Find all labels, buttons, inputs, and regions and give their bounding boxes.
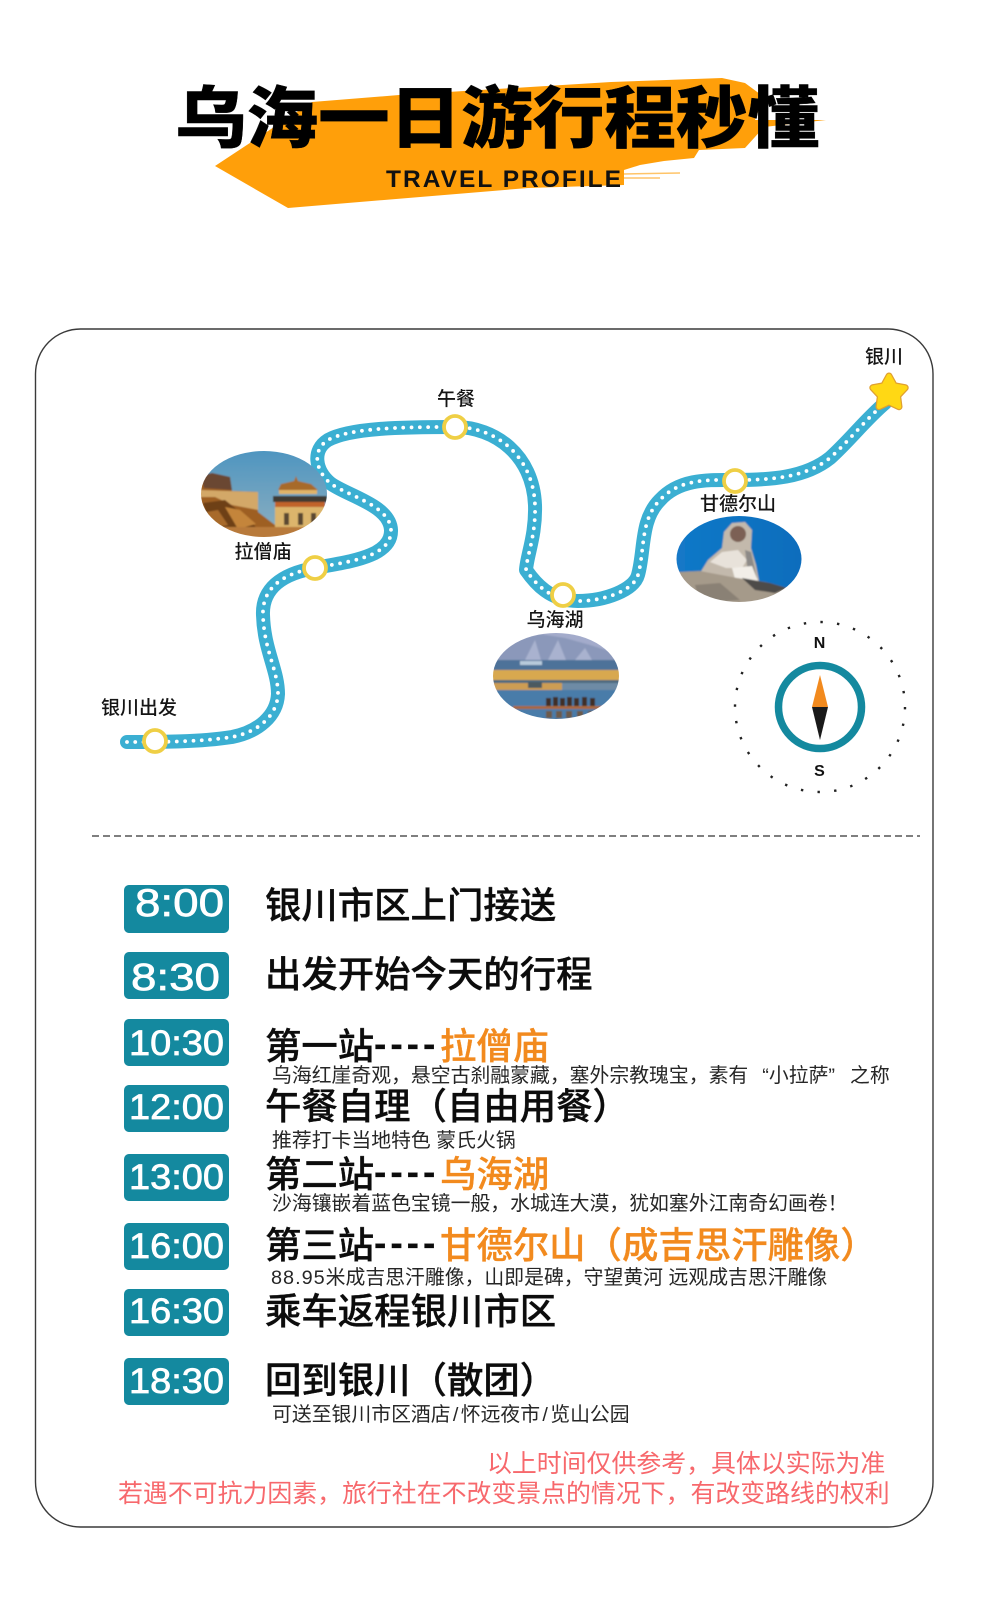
- needle south: [812, 707, 828, 740]
- row 16:30: 16:30: [129, 1292, 224, 1331]
- disclaimer: 若遇不可抗力因素，旅行社在不改变景点的情况下，有改变路线的权利: [118, 1480, 890, 1508]
- panel: itinerary card: [36, 329, 933, 1527]
- row 13:00: 沙海镶嵌着蓝色宝镜一般，水城连大漠，犹如塞外江南奇幻画卷！: [272, 1193, 847, 1215]
- row 13:00: [124, 1151, 847, 1215]
- divider: [92, 835, 920, 837]
- row 18:30: 回到银川（散团）: [265, 1360, 556, 1401]
- photo: genghis khan statue: [676, 516, 802, 602]
- row 13:00: 第二站: [265, 1154, 374, 1195]
- row 12:00: 推荐打卡当地特色 蒙氏火锅: [272, 1130, 516, 1152]
- row 10:30: 第一站: [265, 1026, 374, 1067]
- row 16:00: 甘德尔山（成吉思汗雕像）: [440, 1225, 877, 1266]
- subtitle: TRAVEL PROFILE: [386, 166, 621, 193]
- label: lunch: 午餐: [437, 388, 475, 410]
- route stops: [144, 416, 746, 752]
- row 10:30: 拉僧庙: [440, 1026, 549, 1067]
- label: start: 银川出发: [101, 697, 177, 719]
- label: lake: 乌海湖: [526, 609, 584, 631]
- row 16:00: 第三站: [265, 1225, 374, 1266]
- row 18:30: 可送至银川市区酒店/怀远夜市/览山公园: [272, 1404, 630, 1426]
- route line: [127, 403, 885, 742]
- row 12:00: 12:00: [129, 1088, 224, 1127]
- photo: wuhai lake: [493, 633, 619, 719]
- row 18:30: 18:30: [129, 1362, 224, 1401]
- row 13:00: ----: [374, 1151, 439, 1192]
- row 8:30: [124, 952, 593, 999]
- disclaimer: [118, 1450, 890, 1508]
- letter N: N: [814, 635, 825, 652]
- row 16:00: ----: [374, 1222, 439, 1263]
- compass ring: [778, 666, 862, 748]
- row 8:00: 银川市区上门接送: [265, 885, 556, 926]
- letter S: S: [814, 763, 825, 780]
- orange brush stroke: [215, 78, 826, 208]
- row 10:30: 10:30: [129, 1024, 224, 1063]
- compass: [735, 622, 905, 792]
- dotted ring: [735, 622, 905, 792]
- route map: [101, 346, 905, 752]
- title block: [175, 78, 826, 208]
- row 16:00: 16:00: [129, 1227, 224, 1266]
- label: mountain: 甘德尔山: [700, 493, 776, 515]
- row 10:30: 乌海红崖奇观，悬空古刹融蒙藏，塞外宗教瑰宝，素有 “小拉萨” 之称: [272, 1065, 890, 1087]
- row 8:00: 8:00: [135, 882, 224, 925]
- row 16:00: [124, 1222, 877, 1289]
- row 10:30: ----: [374, 1023, 439, 1064]
- row 16:00: 88.95米成吉思汗雕像，山即是碑，守望黄河 远观成吉思汗雕像: [271, 1267, 827, 1289]
- row 13:00: 13:00: [129, 1158, 224, 1197]
- disclaimer: 以上时间仅供参考，具体以实际为准: [487, 1450, 885, 1478]
- label: destination: 银川: [865, 346, 903, 368]
- row 12:00: [124, 1085, 629, 1152]
- row 8:30: 8:30: [131, 957, 220, 999]
- row 12:00: 午餐自理（自由用餐）: [265, 1086, 629, 1127]
- row 8:00: [124, 882, 556, 933]
- needle north: [812, 675, 828, 707]
- main title: 乌海一日游行程秒懂: [175, 82, 819, 157]
- row 10:30: [124, 1019, 890, 1087]
- row 18:30: [124, 1358, 630, 1426]
- photo: lamasery: [201, 451, 327, 537]
- row 16:30: [124, 1289, 556, 1336]
- label: lamasery: 拉僧庙: [234, 541, 292, 563]
- row 8:30: 出发开始今天的行程: [265, 954, 593, 995]
- row 13:00: 乌海湖: [440, 1154, 549, 1195]
- schedule: [124, 882, 890, 1426]
- brush streaks: [624, 173, 680, 178]
- icon: star destination: [873, 376, 905, 407]
- row 16:30: 乘车返程银川市区: [265, 1291, 556, 1332]
